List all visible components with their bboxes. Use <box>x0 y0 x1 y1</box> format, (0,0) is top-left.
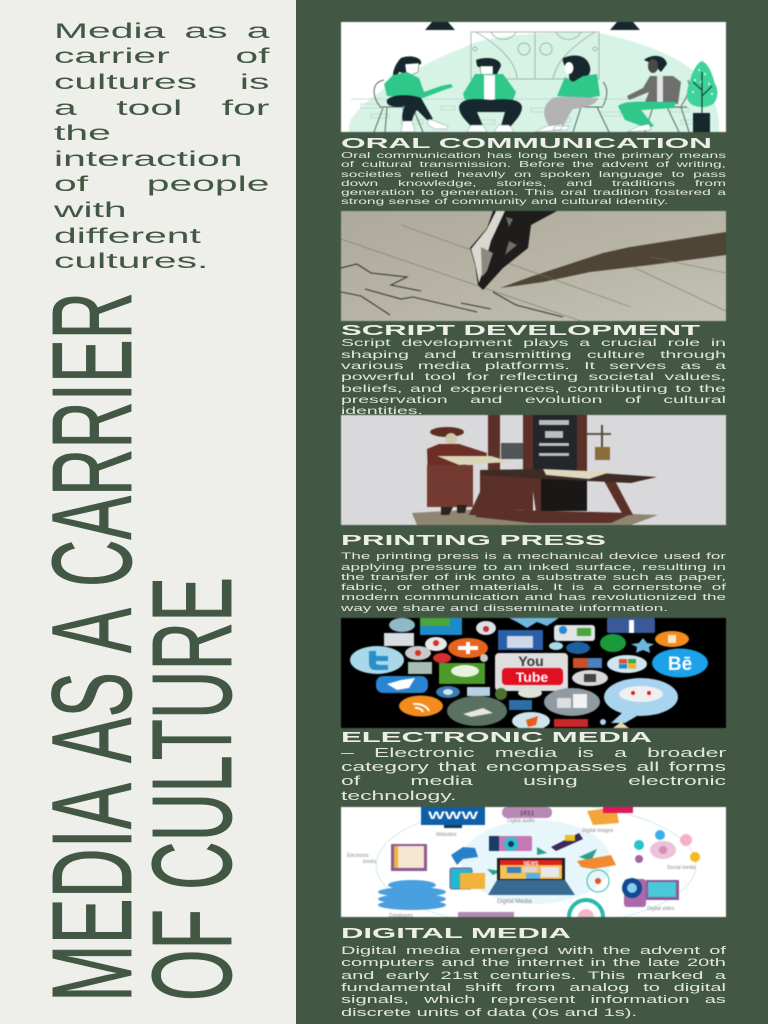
text: script development: various media platforms. It serves as a <box>341 361 726 372</box>
text: digital media: signals, which represent information as <box>341 994 726 1006</box>
heading: script development: SCRIPT DEVELOPMENT <box>341 323 700 339</box>
text: digital media <box>341 945 726 1019</box>
image: digital media diagram <box>340 806 727 918</box>
panel: script development <box>340 210 727 417</box>
panel: left title column <box>0 0 296 1024</box>
panel: electronic media <box>340 617 726 803</box>
image: digital media diagram: 1011 <box>520 810 535 817</box>
text: oral communication: strong sense of community and cultural identity. <box>341 196 668 206</box>
intro paragraph: cultures. <box>54 249 208 273</box>
heading: oral communication: ORAL COMMUNICATION <box>341 136 712 152</box>
plant <box>687 61 717 132</box>
intro paragraph: carrier of <box>54 44 269 68</box>
person 2 <box>459 58 522 132</box>
intro paragraph: with <box>54 198 126 222</box>
intro paragraph: different <box>54 224 200 248</box>
image: digital media diagram: Digital audio <box>507 818 535 824</box>
intro paragraph: the <box>54 121 110 145</box>
vertical main title: CARRIER <box>29 292 155 587</box>
vertical main title: AS <box>29 672 155 763</box>
text: printing press: applying pressure to an inked surface, resulting in <box>341 562 726 573</box>
text: oral communication: Oral communication has long been the primary means <box>341 150 726 160</box>
image: fountain pen nib writing on paper <box>340 210 727 322</box>
image: digital media diagram: books <box>363 859 377 865</box>
image: four people in conversation <box>340 21 727 133</box>
vertical main title <box>29 292 255 1002</box>
text: oral communication: down knowledge, stories, and traditions from <box>341 178 726 188</box>
vertical main title: OF <box>129 909 255 1001</box>
text: digital media: fundamental shift from analog to digital <box>341 982 726 994</box>
image: digital media diagram: Websites <box>436 832 457 838</box>
text: electronic media: technology. <box>341 789 456 803</box>
text: script development: powerful tool for reflecting societal values, <box>341 372 726 383</box>
text: oral communication: societies relied heavily on spoken language to pass <box>341 168 726 178</box>
panel: printing press <box>340 414 727 614</box>
text: digital media: computers and the internet in the late 20th <box>341 957 726 969</box>
heading: digital media: DIGITAL MEDIA <box>341 926 572 942</box>
text: printing press: the transfer of ink onto a substrate such as paper, <box>341 572 726 583</box>
text: digital media: discrete units of data (0s and 1s). <box>341 1007 637 1019</box>
text: script development <box>341 338 726 417</box>
text: oral communication <box>341 150 726 206</box>
vertical main title: CULTURE <box>129 577 255 890</box>
image: digital media diagram: Digital video <box>647 906 674 912</box>
person 1 <box>374 56 453 132</box>
woman <box>427 427 511 515</box>
text: script development: Script development plays a crucial role in <box>341 338 726 349</box>
heading: electronic media: ELECTRONIC MEDIA <box>341 730 653 746</box>
intro paragraph: cultures is <box>54 70 269 94</box>
vertical main title: MEDIA <box>29 783 155 1002</box>
image: digital media diagram: Social media <box>667 865 696 871</box>
text: printing press: The printing press is a mechanical device used for <box>341 551 726 562</box>
intro paragraph: Media as a <box>54 19 269 43</box>
image: cloud of social media icons: Bē <box>668 654 692 675</box>
panel: oral communication <box>340 21 727 206</box>
image: digital media diagram: Electronic <box>347 853 369 859</box>
text: printing press: way we share and disseminate information. <box>341 603 668 614</box>
text: electronic media: category that encompasses all forms <box>341 760 726 774</box>
text: script development: preservation and evolution of cultural <box>341 395 726 406</box>
vertical main title: A <box>29 608 155 653</box>
intro paragraph: a tool for <box>54 96 269 120</box>
text: script development: beliefs, and experiences, contributing to the <box>341 384 726 395</box>
text: printing press <box>341 551 726 614</box>
text: oral communication: of cultural transmission. Before the advent of writing, <box>341 159 726 169</box>
text: printing press: modern communication and has revolutionized the <box>341 592 726 603</box>
intro paragraph: of people <box>54 172 269 196</box>
heading: printing press: PRINTING PRESS <box>341 533 607 549</box>
intro paragraph: interaction <box>54 147 242 171</box>
image: digital media diagram: Digital Media <box>497 899 532 905</box>
text: electronic media <box>341 746 726 803</box>
image: cloud of social media icons <box>340 617 726 729</box>
person 3 <box>535 56 609 132</box>
image: digital media diagram: WWW <box>428 810 479 822</box>
text: electronic media: of media using electronic <box>341 774 726 788</box>
image: cloud of social media icons: You <box>518 653 544 669</box>
text: electronic media: – Electronic media is a broader <box>341 746 726 760</box>
person 4 <box>618 56 689 132</box>
image: historic printing press with woman <box>340 414 727 526</box>
intro paragraph <box>54 19 270 273</box>
text: digital media: and early 21st centuries. This marked a <box>341 970 726 982</box>
text: digital media: Digital media emerged with the advent of <box>341 945 726 957</box>
image: cloud of social media icons: Tube <box>516 669 548 685</box>
text: script development: identities. <box>341 406 423 417</box>
image: digital media diagram: NEWS <box>524 861 539 867</box>
text: printing press: fabric, or other materials. It is a cornerstone of <box>341 582 726 593</box>
text: oral communication: generation to generation. This oral tradition fostered a <box>341 187 726 197</box>
image: digital media diagram: Digital images <box>582 828 614 834</box>
panel: right content column background <box>296 0 768 1024</box>
text: script development: shaping and transmitting culture through <box>341 350 726 361</box>
panel: digital media <box>340 806 727 1019</box>
